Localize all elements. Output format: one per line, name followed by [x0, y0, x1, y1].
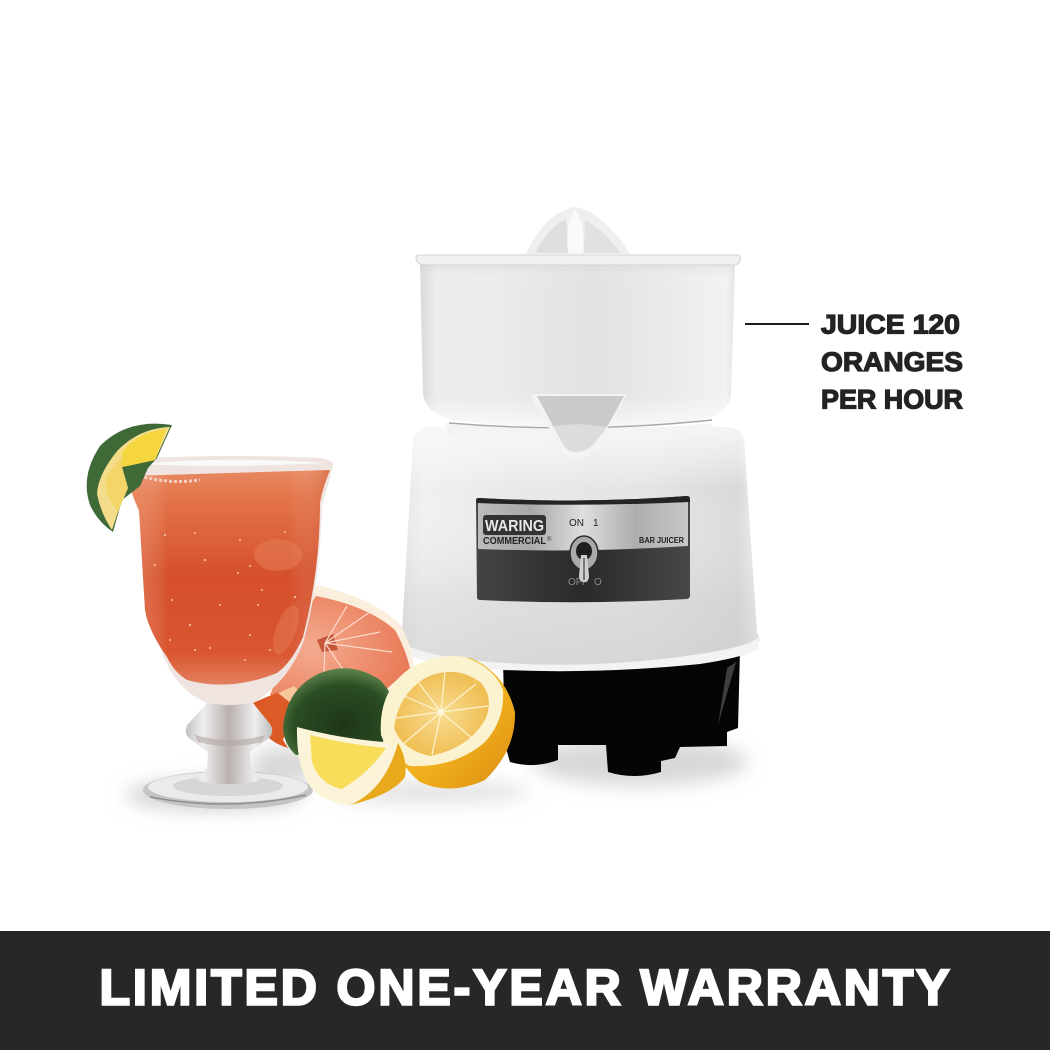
collar under bowl: [446, 423, 714, 440]
fruit: grapefruit half: [253, 585, 414, 748]
glass bowl: [122, 456, 333, 705]
callout: juice 120 oranges per hour: ORANGES: [821, 347, 963, 377]
spout: [530, 394, 627, 459]
juice bowl: [416, 255, 740, 428]
juicer housing: [401, 427, 760, 671]
brand logo: [483, 515, 552, 547]
drink glass: [87, 424, 333, 809]
callout: juice 120 oranges per hour: [821, 310, 963, 414]
juice: [127, 470, 330, 685]
product: juicer: [401, 207, 760, 776]
callout: juice 120 oranges per hour: JUICE 120: [821, 310, 960, 340]
grapefruit core: [317, 634, 338, 652]
ground shadow: [125, 738, 748, 811]
brand logo: ®: [547, 536, 552, 543]
brand logo: COMMERCIAL: [483, 535, 547, 547]
bowl rim: [416, 255, 740, 265]
lime wedge garnish: [87, 424, 172, 532]
control plate: [476, 496, 690, 602]
lemon pulp: [394, 671, 489, 756]
warranty banner: [0, 931, 1050, 1050]
bubbles: [154, 531, 296, 661]
callout line: [745, 323, 809, 325]
switch labels: 1: [593, 518, 599, 529]
switch labels: O: [594, 577, 602, 588]
fruit: whole lime: [283, 668, 393, 755]
glass stem: [186, 703, 272, 784]
switch labels: ON: [569, 518, 584, 529]
switch labels: [568, 518, 684, 588]
glass foot: [143, 771, 313, 809]
juicer black base with feet: [503, 650, 740, 776]
toggle switch: [570, 536, 598, 582]
reamer cone: [526, 207, 630, 254]
banner text: LIMITED ONE-YEAR WARRANTY: [100, 960, 950, 1016]
salted rim: [130, 473, 200, 481]
housing bottom rim: [401, 636, 760, 671]
juice highlights: [254, 539, 302, 571]
switch labels: OFF: [568, 577, 588, 588]
brand logo: WARING: [485, 518, 544, 535]
switch labels: BAR JUICER: [639, 536, 684, 545]
fruit: lemon wedge: [297, 727, 406, 805]
fruit: lemon half: [381, 656, 515, 789]
callout: juice 120 oranges per hour: PER HOUR: [821, 384, 963, 414]
